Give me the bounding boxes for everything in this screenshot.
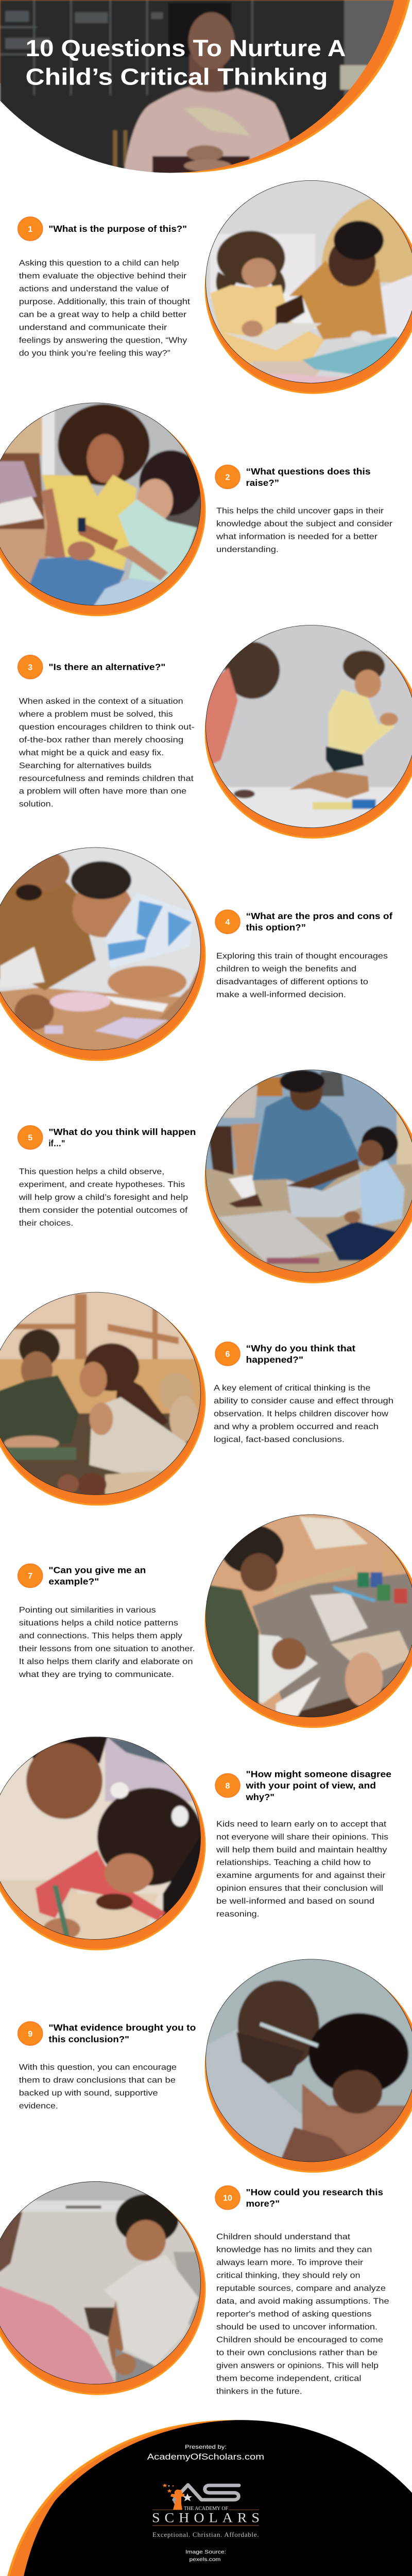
body text 4: disadvantages of different options to: [216, 977, 368, 986]
photo: smiling boy in kitchen: [0, 2178, 210, 2395]
body text 10: should be used to uncover information.: [216, 2323, 377, 2331]
photo: father and daughter drawing: [0, 1731, 210, 1951]
heading 5: "What do you think will happen: [48, 1127, 196, 1137]
body text 5: experiment, and create hypotheses. This: [19, 1180, 185, 1189]
body text 4: children to weigh the benefits and: [216, 964, 356, 973]
body text 5: will help grow a child’s foresight and help: [19, 1193, 188, 1202]
body text 10: knowledge has no limits and they can: [216, 2245, 372, 2254]
number badge 6: [215, 1342, 240, 1366]
body text 8: be well-informed and based on sound: [216, 1896, 374, 1906]
body text 10: reporter's method of asking questions: [216, 2310, 371, 2318]
title: [26, 35, 346, 90]
panel: question 8: [0, 1731, 391, 1951]
heading 6: “Why do you think that: [246, 1343, 355, 1353]
heading 8: with your point of view, and: [245, 1781, 376, 1791]
body text 3: of-the-box rather than merely choosing: [19, 735, 183, 744]
body text 6: and why a problem occurred and reach: [214, 1422, 379, 1431]
number badge 4: [215, 910, 240, 934]
body text 7: Pointing out similarities in various: [19, 1605, 156, 1615]
heading 10: [246, 2187, 383, 2209]
logo: The Academy of Scholars: Exceptional. Christian. Affordable.: [152, 2531, 259, 2538]
number badge 5: 5: [28, 1134, 32, 1142]
body text 10: reputable sources, compare and analyze: [216, 2284, 386, 2293]
body text 3: resourcefulness and reminds children that: [19, 774, 194, 783]
website: AcademyOfScholars.com: [147, 2452, 264, 2462]
body text 9: [19, 2063, 177, 2111]
body text 1: them evaluate the objective behind their: [19, 272, 187, 281]
panel: question 1: [18, 174, 412, 394]
body text 3: solution.: [19, 800, 54, 809]
body text 10: thinkers in the future.: [216, 2387, 302, 2396]
heading 10: more?": [246, 2198, 280, 2209]
heading 1: "What is the purpose of this?": [48, 224, 187, 234]
body text 8: not everyone will share their opinions. This: [216, 1833, 388, 1841]
number badge 4: 4: [226, 918, 230, 927]
footer: [7, 2420, 412, 2576]
number badge 1: [18, 217, 43, 241]
number badge 9: 9: [28, 2030, 32, 2039]
body text 3: where a problem must be solved, this: [19, 709, 173, 719]
body text 1: can be a great way to help a child better: [19, 310, 187, 319]
body text 1: actions and understand the value of: [19, 284, 169, 294]
number badge 8: 8: [226, 1782, 230, 1790]
body text 3: [19, 697, 195, 809]
body text 1: Asking this question to a child can help: [19, 259, 179, 268]
number badge 9: [18, 2022, 43, 2045]
body text 1: purpose. Additionally, this train of thought: [19, 297, 191, 307]
photo: mother and daughter with dropper bottle: [0, 399, 210, 616]
body text 9: evidence.: [19, 2102, 58, 2111]
photo: father and son with shapes on floor: [0, 841, 210, 1061]
panel: question 4: [0, 841, 392, 1061]
heading 5: [48, 1127, 196, 1148]
body text 5: them consider the potential outcomes of: [19, 1206, 188, 1215]
number badge 10: [215, 2186, 240, 2210]
heading 2: [246, 466, 371, 488]
body text 10: given answers or opinions. This will help: [216, 2361, 379, 2370]
photo: mother and child on rug: [200, 1063, 412, 1283]
number badge 10: 10: [223, 2194, 232, 2202]
title: 10 Questions To Nurture A: [26, 35, 346, 61]
body text 2: This helps the child uncover gaps in their: [216, 506, 384, 516]
body text 3: a problem will often have more than one: [19, 787, 186, 796]
photo: boy and girl with teddy bear: [0, 1286, 210, 1505]
body text 10: always learn more. To improve their: [216, 2258, 364, 2267]
body text 2: what information is needed for a better: [216, 532, 378, 541]
number badge 3: 3: [28, 664, 32, 672]
body text 7: It also helps them clarify and elaborate on: [19, 1657, 193, 1666]
body text 8: reasoning.: [216, 1909, 260, 1919]
body text 6: ability to consider cause and effect through: [214, 1396, 393, 1405]
heading 2: raise?”: [246, 478, 279, 488]
heading 7: "Can you give me an: [48, 1565, 146, 1575]
body text 6: A key element of critical thinking is the: [214, 1383, 370, 1393]
body text 10: Children should understand that: [216, 2232, 351, 2241]
number badge 1: 1: [28, 225, 32, 234]
number badge 7: [18, 1564, 43, 1588]
body text 9: backed up with sound, supportive: [19, 2089, 158, 2098]
body text 7: situations helps a child notice patterns: [19, 1618, 178, 1628]
body text 10: to their own conclusions rather than be: [216, 2348, 377, 2357]
body text 7: their lessons from one situation to another.: [19, 1644, 195, 1653]
body text 6: logical, fact-based conclusions.: [214, 1435, 345, 1444]
panel: question 9: [18, 1953, 412, 2173]
body text 5: This question helps a child observe,: [19, 1167, 164, 1176]
panel: question 5: [18, 1063, 412, 1283]
number badge 2: [215, 465, 240, 489]
title: Child’s Critical Thinking: [26, 63, 328, 90]
panel: question 6: [0, 1286, 393, 1505]
heading 7: example?": [48, 1577, 99, 1587]
logo: The Academy of Scholars: THE ACADEMY OF: [184, 2506, 228, 2512]
panel: question 2: [0, 399, 393, 616]
logo: The Academy of Scholars: SCHOLARS: [152, 2510, 260, 2526]
heading 2: “What questions does this: [246, 466, 371, 477]
header photo: girl at chalkboard: [0, 0, 412, 179]
body text 3: question encourages children to think out-: [19, 722, 195, 732]
body text 6: [214, 1383, 393, 1444]
heading 8: "How might someone disagree: [246, 1769, 391, 1780]
number badge 8: [215, 1774, 240, 1798]
body text 10: Children should be encouraged to come: [216, 2335, 383, 2344]
heading 4: this option?”: [246, 922, 306, 933]
heading 4: “What are the pros and cons of: [246, 911, 392, 921]
photo: father and child foreheads together: [200, 1953, 412, 2173]
body text 8: Kids need to learn early on to accept that: [216, 1820, 387, 1828]
body text 8: relationships. Teaching a child how to: [216, 1858, 371, 1867]
body text 8: [216, 1820, 388, 1919]
heading 6: happened?": [246, 1354, 303, 1365]
heading 8: why?": [245, 1792, 274, 1802]
body text 8: examine arguments for and against their: [216, 1871, 386, 1880]
presented by: Presented by:: [185, 2444, 227, 2450]
body text 3: Searching for alternatives builds: [19, 761, 151, 770]
body text 3: what might be a quick and easy fix.: [19, 748, 164, 757]
panel: question 3: [18, 616, 412, 839]
body text 4: Exploring this train of thought encourages: [216, 952, 388, 960]
header banner: [0, 0, 412, 179]
image source: Image Source:: [185, 2549, 226, 2555]
body text 8: will help them build and maintain healthy: [216, 1845, 388, 1854]
body text 10: critical thinking, they should rely on: [216, 2271, 360, 2280]
photo: father and toddler with blocks: [200, 616, 412, 839]
body text 2: [216, 506, 393, 554]
heading 9: [48, 2023, 196, 2044]
heading 7: [48, 1565, 146, 1587]
heading 8: [245, 1769, 391, 1802]
body text 10: data, and avoid making assumptions. The: [216, 2297, 389, 2306]
body text 6: observation. It helps children discover how: [214, 1409, 388, 1418]
number badge 7: 7: [28, 1572, 32, 1581]
body text 10: [216, 2232, 389, 2396]
body text 7: [19, 1605, 195, 1679]
body text 1: do you think you’re feeling this way?”: [19, 349, 170, 358]
image source: [185, 2549, 226, 2563]
heading 5: if…": [48, 1138, 65, 1148]
photo: boy drawing at craft table: [200, 1509, 412, 1728]
body text 7: what they are trying to communicate.: [19, 1670, 174, 1679]
body text 3: When asked in the context of a situation: [19, 697, 183, 706]
panel: question 10: [0, 2178, 389, 2396]
image source: pexels.com: [189, 2556, 221, 2563]
body text 7: and connections. This helps them apply: [19, 1631, 183, 1640]
body text 2: understanding.: [216, 545, 279, 554]
number badge 5: [18, 1126, 43, 1149]
body text 1: understand and communicate their: [19, 323, 167, 332]
heading 6: [246, 1343, 355, 1365]
body text 4: make a well-informed decision.: [216, 990, 346, 999]
body text 9: them to draw conclusions that can be: [19, 2076, 176, 2085]
body text 4: [216, 952, 388, 999]
body text 1: [19, 259, 191, 358]
photo: father and daughter reading: [200, 174, 412, 394]
body text 5: [19, 1167, 188, 1228]
body text 9: With this question, you can encourage: [19, 2063, 177, 2072]
body text 5: their choices.: [19, 1218, 73, 1228]
heading 3: "Is there an alternative?": [48, 662, 165, 672]
number badge 3: [18, 655, 43, 679]
panel: question 7: [18, 1509, 412, 1728]
number badge 6: 6: [226, 1350, 230, 1359]
heading 9: this conclusion?": [48, 2034, 129, 2044]
body text 8: opinion ensures that their conclusion will: [216, 1884, 383, 1893]
body text 2: knowledge about the subject and consider: [216, 519, 393, 529]
heading 10: "How could you research this: [246, 2187, 383, 2197]
logo: The Academy of Scholars: [152, 2483, 260, 2538]
body text 10: them become independent, critical: [216, 2374, 361, 2383]
number badge 2: 2: [226, 473, 230, 482]
heading 9: "What evidence brought you to: [48, 2023, 196, 2033]
heading 4: [246, 911, 392, 933]
body text 1: feelings by answering the question, “Why: [19, 336, 187, 345]
